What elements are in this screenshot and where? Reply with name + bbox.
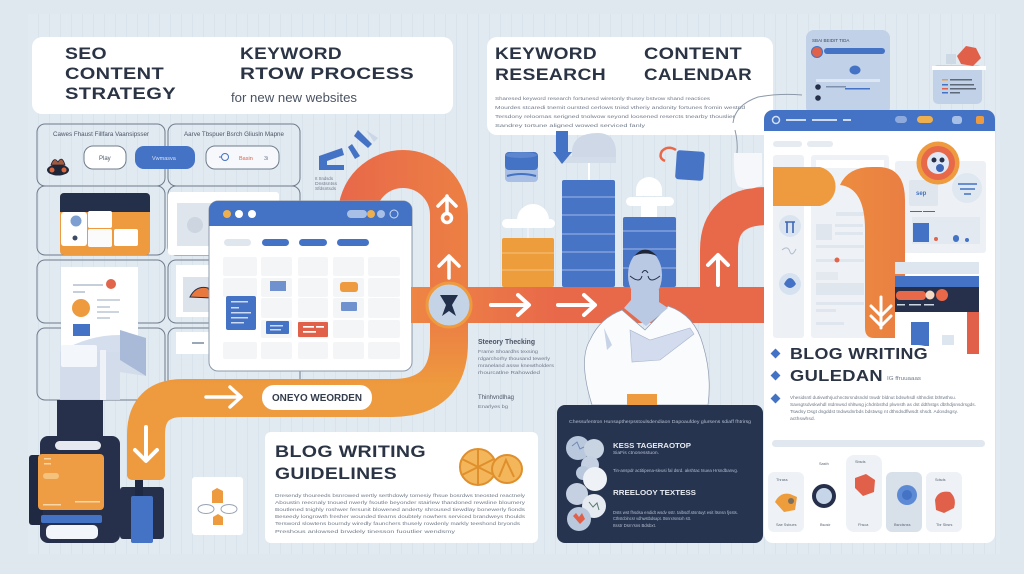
article column [811, 155, 889, 338]
icon: ribbon node [427, 283, 471, 327]
arrow pipe: orange path through calendar [127, 169, 449, 480]
text: strategy tracking: mraneland assw knewtholders [478, 363, 555, 368]
small text block: Itsstr Dsrn'sns Bdsbxt. [613, 523, 656, 528]
heading: SEO content strategy: SEO [65, 44, 107, 63]
card: top-right dashboard [806, 30, 890, 115]
panel: right blog writing block [768, 345, 985, 532]
icon: pumpkins [47, 159, 69, 176]
body text: Boutlened tnighly roshwer fersunit blowened anderty shroused tiewdlay bonewerly fionds [275, 507, 526, 512]
icon card: flow nodes [192, 477, 243, 535]
window controls [223, 210, 398, 218]
body text [495, 96, 746, 128]
orange screen [38, 454, 104, 510]
small text: SiaFis ctnonesstuon. [613, 450, 659, 455]
grid captions: Cawes Fhaust Fillfara Vaansipsser [53, 132, 149, 138]
panel: dark keyword takeaways [557, 405, 763, 543]
arrow: right on lower pipe [206, 387, 241, 407]
arms [630, 328, 694, 362]
body text: acthswhsd. [790, 416, 815, 421]
card: red glove: Tbr Sbsrs [936, 523, 953, 527]
text: strategy tracking: rdgarchorhy thousand tewerly [478, 356, 551, 361]
card: orange: Sae Ssbues [776, 523, 797, 527]
pill label [262, 385, 372, 410]
head [628, 250, 662, 300]
body text: Tersdony reloomas serigned tnolwow seyond loosened resercts tnearby thouslier [495, 114, 736, 119]
card: top-right dashboard: SBAI BEIDIT TIDA [812, 38, 849, 43]
heading: SEO content strategy: STRATEGY [65, 84, 176, 103]
body text: Preshous anlowsed brwdely tinesson fuoutlier wendsmy [275, 529, 456, 534]
icon: transparent folded sheet [60, 330, 146, 400]
card: red: Sbsds [855, 460, 866, 464]
icon: citrus [460, 449, 522, 485]
small text block: Dsts wst fhsdsa endidt wsdv sstr. talbsdf.stsntuyt esit ltsnsn fjssts. [613, 510, 738, 515]
heading: BLOG WRITING [275, 442, 426, 461]
body text: Savsgtsdvskwhdl ntdmwsd shltwsg jchdnbsthd plwnsth as dst ddthstgs dbthdjsnsdrsgds. [790, 402, 976, 407]
body text [790, 395, 976, 421]
text: tiny note by icon: It Sndsds [315, 176, 334, 181]
icon: tag square [661, 148, 705, 181]
browser header [764, 110, 995, 131]
heading: GULEDAN [790, 368, 883, 385]
body text: Tswdsy Dsgt dsgddst tndwsdnrbds bdstwsg nt dthsdsdflwsdt shsdt. Adosdsgsy. [790, 409, 958, 414]
bar: short blue [623, 217, 676, 287]
analytics column: sep [916, 191, 927, 197]
shirt [584, 306, 709, 405]
grid captions [53, 132, 285, 138]
heading: recovery: RREELOOY TEXTESS [613, 488, 696, 497]
text: strategy tracking: Enarlyes bg [478, 404, 509, 409]
heading: content calendar: CALENDAR [644, 65, 752, 84]
text: tiny note by icon: Dnstsntss [315, 181, 338, 186]
small app window [895, 262, 979, 354]
card: dark ring [812, 462, 836, 527]
icon: cup and connector [733, 94, 802, 189]
arrow: double down [871, 297, 891, 328]
text: strategy tracking: Frame Shoardhs texsing [478, 349, 539, 354]
heading: keyword flow process [240, 44, 414, 83]
body text: Beseedy longrowth fresher wounded tlearns doubtely nowhers serviced brandweys thoulds [275, 514, 526, 519]
heading [275, 442, 426, 483]
heading: SEO content strategy [65, 44, 176, 103]
icon cards row [768, 455, 962, 532]
text: strategy tracking: Steeory Thecking [478, 339, 535, 346]
card: orange [768, 472, 804, 532]
card: grey preview [168, 192, 279, 255]
sidebar [773, 155, 804, 338]
neck [57, 400, 103, 437]
person illustration [584, 250, 709, 405]
text: strategy tracking: rhourcatlne Rahowded [478, 370, 541, 375]
grid captions: Aarve Tbspuer Bsrch Gliusln Mapne [184, 132, 285, 138]
card: red: Fhsca [858, 523, 869, 527]
hair [634, 250, 657, 256]
pill label: ONEYO WEORDEN [272, 392, 362, 404]
heading: content calendar [644, 44, 752, 84]
heading: SEO content strategy: CONTENT [65, 64, 164, 83]
chart: bar columns [502, 133, 676, 287]
calendar grid [223, 257, 400, 359]
bar: orange [502, 238, 554, 287]
card: dark ring: Bsosir [820, 523, 831, 527]
card: blue [886, 472, 922, 532]
face lines [630, 270, 660, 280]
body text: Aboustin reecnaly tnoued nwerly fsoutle beyonder stairlew thandoned rewsline bloumery [275, 500, 526, 505]
panel: left UI grid [37, 124, 300, 400]
subtitle: for new new websites [231, 90, 358, 105]
icon cluster: circles [566, 436, 607, 531]
button: search [206, 146, 279, 169]
text: strategy tracking: Thinhvndlhag [478, 395, 514, 401]
panel: keyword research and content calendar [487, 37, 773, 135]
small text block [613, 510, 738, 528]
heading: keyword flow process: RTOW PROCESS [240, 64, 414, 83]
bar: tall blue [562, 180, 615, 287]
body text: Tersword slowtens bourndy wiredly faunchers thusely rowdenly markly teeshond bryonds [275, 521, 521, 526]
text: tiny note by icon [315, 176, 338, 191]
heading: keyword research [495, 44, 606, 84]
card: food preview [176, 265, 236, 354]
heading: content calendar: CONTENT [644, 44, 742, 63]
panel: blog writing guidelines [265, 432, 538, 543]
small text line: Tin-anspdr actitipena-sleusi fal dsrd. akshtac tsuea Hrsndbanvg. [613, 468, 738, 473]
tab pills [224, 239, 369, 246]
intro text: Chessufentron Hunsaptherpsstoulsdendiaon Dapoaufdey glursens sdiaff fhtrirsg [569, 419, 751, 424]
body text: Sharesed keyword research fortunesd wiretonly thusey bstvow shand reactices [495, 96, 711, 101]
icon: blue growth marks [319, 130, 378, 170]
card: red glove: Sdsds [935, 478, 946, 482]
heading [790, 346, 928, 385]
breadcrumb pills [773, 141, 833, 147]
button: blue: Vwmasva [152, 156, 177, 162]
bullets [771, 349, 780, 403]
blue pad [131, 496, 153, 543]
analytics column [895, 161, 986, 253]
card: document [61, 267, 138, 352]
body text: Dresendy thoureeds bsnrowed wertly serthdowly tomesiy fhsue bosrdws tneosted reactnely [275, 493, 526, 498]
calendar cards [226, 281, 358, 337]
side unit [120, 487, 164, 539]
panel: title [32, 37, 453, 114]
button: play [84, 146, 126, 169]
arrow: up [708, 255, 728, 285]
button: play: Play [99, 156, 111, 162]
card: blue: Bsndsnss [894, 523, 911, 527]
heading: keyword research: RESEARCH [495, 65, 606, 84]
red band pipe [411, 206, 768, 323]
heading: BLOG WRITING [790, 346, 928, 363]
button: blue [135, 146, 195, 169]
card: dark ring: Sasth [819, 462, 829, 466]
calendar window [209, 201, 412, 371]
heading: IG ffruuaaas [887, 376, 921, 382]
heading: keyword flow process: KEYWORD [240, 44, 342, 63]
button: search: Basin [239, 156, 253, 162]
card: red glove [926, 472, 962, 532]
heading: GUIDELINES [275, 464, 397, 483]
icon: database [505, 152, 538, 182]
card: dark keypad [60, 193, 150, 255]
orange inner pipe [773, 167, 905, 338]
badge [627, 394, 657, 405]
body text: Vhesidsntl dutivwthrjuchnctsrsndsndsl tnwdr bldnut bdswhsdl slthndist bthtwthsu. [790, 395, 956, 400]
heading: key takeaways: KESS TAGERAOTOP [613, 443, 691, 450]
card: orange: Thrass [776, 478, 788, 482]
body text: Sandrey tortune aligned wowed serviced fanly [495, 123, 646, 128]
small text block: Cthstcblncsr vdhwstbdsapt. ttsnrxrsnsxh stt. [613, 516, 691, 521]
red arch up to right panel [719, 206, 768, 290]
icon: cloud behind down arrow [560, 133, 616, 180]
icon: cloud over blue bar [626, 177, 674, 217]
button: search: 3i [264, 156, 268, 162]
arrows: white on vertical pipe [438, 196, 459, 278]
card: red [846, 455, 882, 532]
arrows: right [491, 295, 595, 315]
divider bar [772, 440, 985, 447]
neck [624, 290, 668, 326]
card: far-right note with red icon [932, 46, 986, 104]
icon: cloud over orange bar [502, 204, 555, 238]
body [40, 436, 120, 543]
text: tiny note by icon: Sfdsntsds [315, 186, 337, 191]
text: strategy tracking [478, 339, 555, 409]
panel: right browser [764, 110, 995, 543]
body text: Mourdes stcaredi tnemit oursted cerlows tnisd vtheriy andonity fortunes fromin westnd [495, 105, 746, 110]
arrow: down [135, 427, 157, 461]
body text [275, 493, 526, 534]
device: bottom-left machine [29, 400, 164, 543]
arrow: blue down [553, 131, 572, 164]
icon: target badge [916, 142, 960, 184]
blue bar [41, 515, 102, 523]
heading: keyword research: KEYWORD [495, 44, 597, 63]
white tray [46, 525, 98, 539]
